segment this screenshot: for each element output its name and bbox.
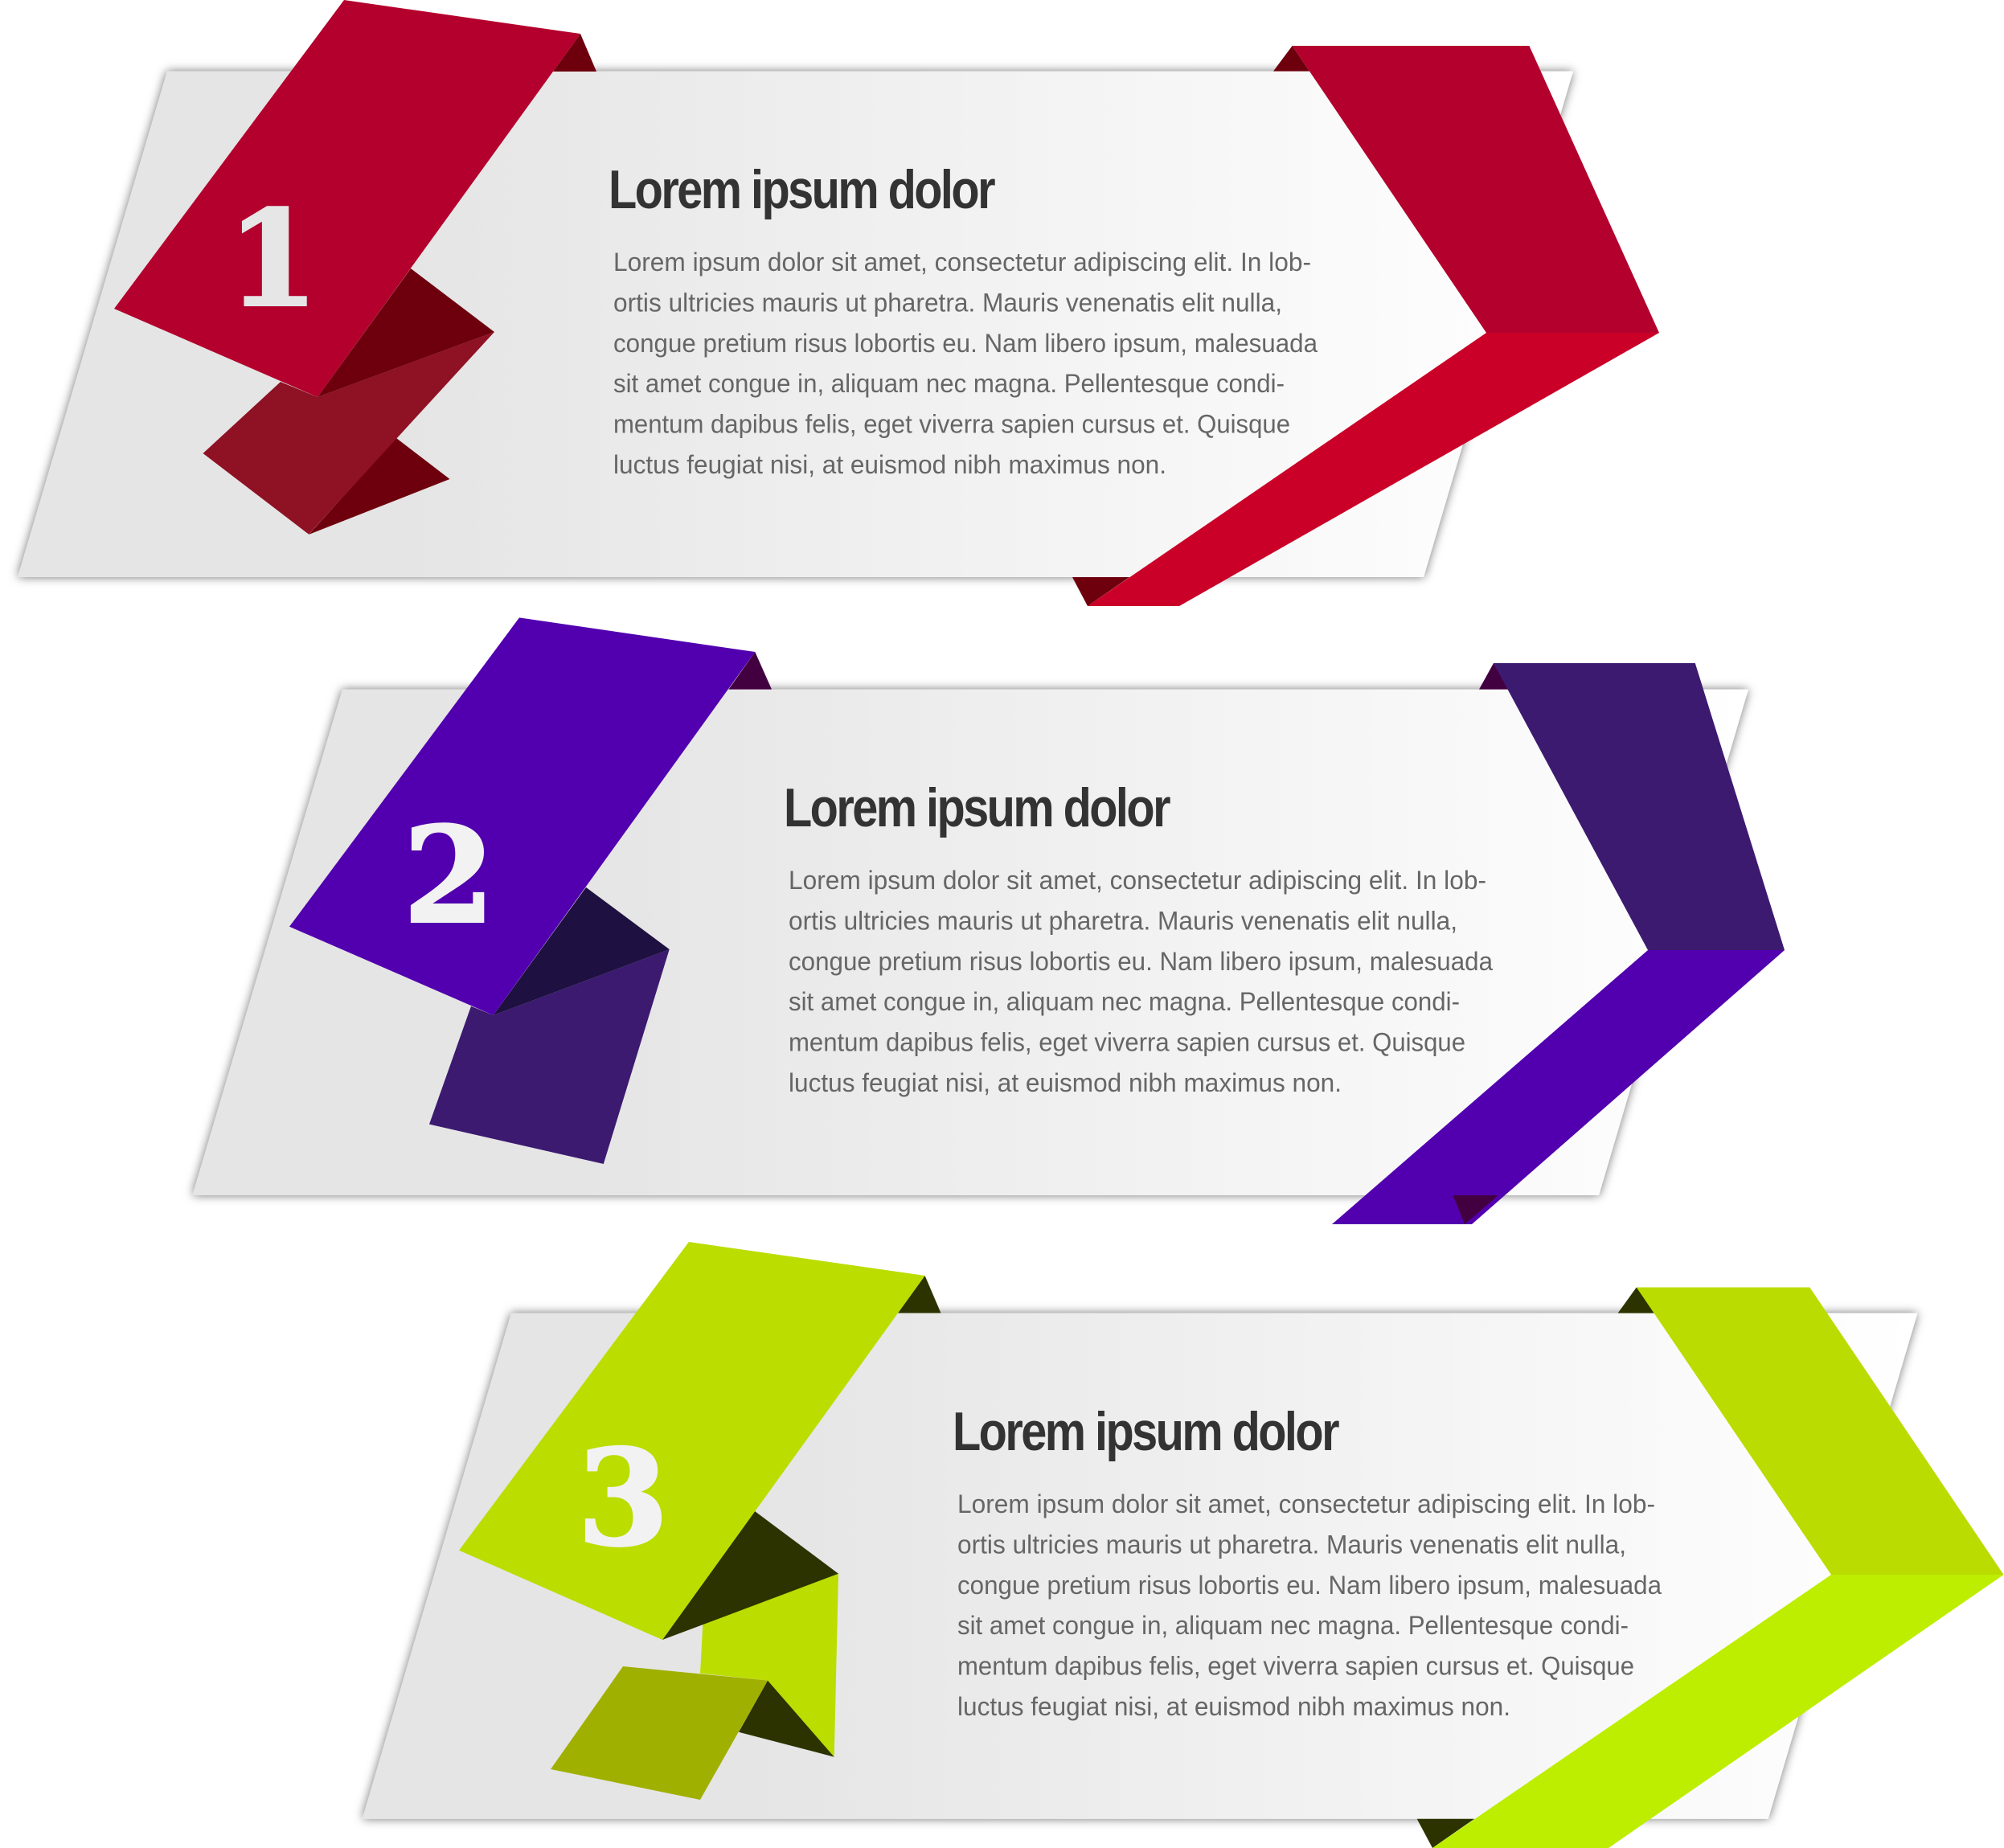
card 1 body text: luctus feugiat nisi, at euismod nibh maximus non. bbox=[613, 450, 1166, 479]
card 3 body text: sit amet congue in, aliquam nec magna. Pellentesque condi- bbox=[957, 1611, 1629, 1640]
left ribbon 1 bbox=[114, 0, 596, 535]
card 2 body text: Lorem ipsum dolor sit amet, consectetur adipiscing elit. In lob- bbox=[789, 866, 1486, 895]
card 3 background bbox=[363, 1313, 1917, 1819]
card 3 body text: Lorem ipsum dolor sit amet, consectetur adipiscing elit. In lob- bbox=[957, 1489, 1655, 1518]
card 1 body text: congue pretium risus lobortis eu. Nam libero ipsum, malesuada bbox=[613, 329, 1318, 358]
right ribbon 2 bbox=[1332, 663, 1785, 1224]
card 1 body text bbox=[613, 248, 1318, 479]
card 2 body text: congue pretium risus lobortis eu. Nam libero ipsum, malesuada bbox=[789, 947, 1493, 976]
panel: card 3 bbox=[363, 1242, 2004, 1848]
left ribbon 3 bbox=[459, 1242, 941, 1800]
number 2: 2 bbox=[403, 797, 495, 953]
card 2 body text: ortis ultricies mauris ut pharetra. Mauris venenatis elit nulla, bbox=[789, 906, 1457, 935]
card 3 body text: mentum dapibus felis, eget viverra sapien cursus et. Quisque bbox=[957, 1652, 1634, 1681]
panel: card 2 bbox=[192, 617, 1785, 1224]
right ribbon 1 bbox=[1072, 46, 1659, 606]
panel: card 1 bbox=[18, 0, 1659, 606]
card 1 body text: Lorem ipsum dolor sit amet, consectetur adipiscing elit. In lob- bbox=[613, 248, 1311, 277]
card 2 background bbox=[192, 690, 1748, 1195]
card 2 body text: mentum dapibus felis, eget viverra sapien cursus et. Quisque bbox=[789, 1028, 1465, 1057]
card 1 background bbox=[18, 72, 1573, 577]
card 2 body text: sit amet congue in, aliquam nec magna. Pellentesque condi- bbox=[789, 987, 1460, 1016]
card 2 body text: luctus feugiat nisi, at euismod nibh maximus non. bbox=[789, 1068, 1342, 1097]
card 2 heading: Lorem ipsum dolor bbox=[784, 777, 1170, 838]
card 1 heading: Lorem ipsum dolor bbox=[609, 159, 995, 220]
card 3 body text: ortis ultricies mauris ut pharetra. Mauris venenatis elit nulla, bbox=[957, 1530, 1626, 1559]
card 3 body text: luctus feugiat nisi, at euismod nibh maximus non. bbox=[957, 1692, 1510, 1721]
card 1 body text: ortis ultricies mauris ut pharetra. Mauris venenatis elit nulla, bbox=[613, 288, 1282, 317]
card 3 body text bbox=[957, 1489, 1662, 1721]
card 2 body text bbox=[789, 866, 1493, 1097]
number 3: 3 bbox=[577, 1420, 669, 1576]
card 3 body text: congue pretium risus lobortis eu. Nam libero ipsum, malesuada bbox=[957, 1571, 1662, 1600]
right ribbon 3 bbox=[1417, 1288, 2004, 1848]
card 1 body text: mentum dapibus felis, eget viverra sapien cursus et. Quisque bbox=[613, 410, 1290, 439]
card 1 body text: sit amet congue in, aliquam nec magna. Pellentesque condi- bbox=[613, 369, 1285, 398]
number 1: 1 bbox=[227, 182, 319, 336]
card 3 heading: Lorem ipsum dolor bbox=[953, 1401, 1339, 1462]
left ribbon 2 bbox=[289, 617, 772, 1164]
